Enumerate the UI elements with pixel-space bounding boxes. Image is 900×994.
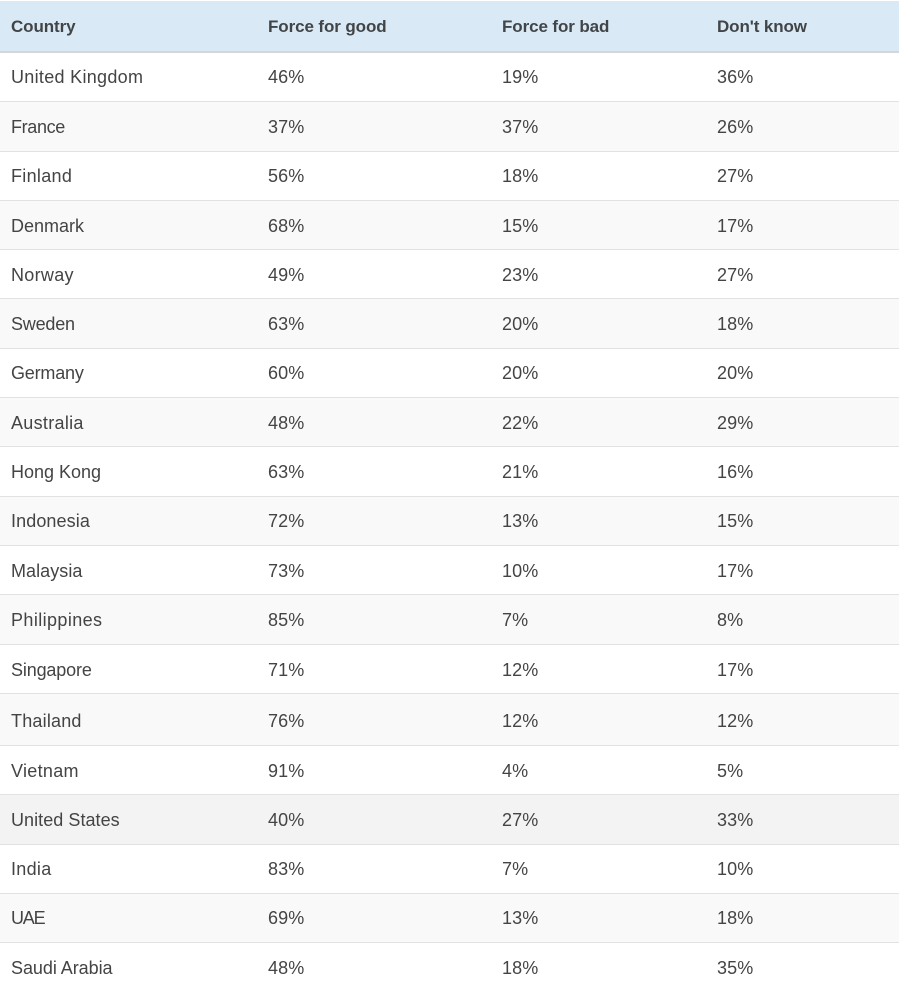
row: Finland: Finland [11,166,72,186]
row: Philippines: 8% [717,610,743,630]
row: Sweden: 18% [717,314,753,334]
row: Malaysia [0,546,899,595]
row: Indonesia: 15% [717,511,753,531]
row: Thailand: 76% [268,710,304,730]
row: United States: United States [11,810,120,830]
row: Philippines: Philippines [11,610,102,630]
row: UAE: 18% [717,908,753,928]
row: Australia [0,398,899,447]
row: Denmark [0,201,899,250]
row: Finland: 18% [502,166,538,186]
row: Norway [0,250,899,299]
row: Saudi Arabia: 18% [502,958,538,978]
header row: Force for good [268,17,387,36]
row: Denmark: 68% [268,216,304,236]
row: Indonesia: 13% [502,511,538,531]
row: United Kingdom: 46% [268,67,304,87]
row: United States: 27% [502,810,538,830]
row: UAE: 13% [502,908,538,928]
row: Finland: 27% [717,166,753,186]
row: Indonesia: 72% [268,511,304,531]
row: Malaysia: 73% [268,561,304,581]
row: Germany: 60% [268,363,304,383]
row: Hong Kong: Hong Kong [11,462,101,482]
row: India: 10% [717,859,753,879]
row: Vietnam: 91% [268,761,304,781]
header row: Force for bad [502,17,609,36]
row: Australia: Australia [11,413,84,433]
row: Singapore [0,645,899,694]
row: Singapore: Singapore [11,660,92,680]
row: Australia: 29% [717,413,753,433]
row: Germany: 20% [502,363,538,383]
row: UAE: 69% [268,908,304,928]
row: France: 37% [502,116,538,136]
row: Singapore: 12% [502,660,538,680]
row: Hong Kong: 63% [268,462,304,482]
row: Saudi Arabia: Saudi Arabia [11,958,112,978]
row: Thailand: Thailand [11,710,82,730]
row: Saudi Arabia: 35% [717,958,753,978]
header row: Don't know [717,17,807,36]
row: Singapore: 17% [717,660,753,680]
row: India: 7% [502,859,528,879]
row: India: 83% [268,859,304,879]
row: Germany [0,349,899,398]
row: India [0,845,899,894]
row: Saudi Arabia: 48% [268,958,304,978]
row: Indonesia [0,497,899,546]
row: Finland: 56% [268,166,304,186]
row: France: 37% [268,116,304,136]
row: Singapore: 71% [268,660,304,680]
row: Denmark: 17% [717,216,753,236]
row: Germany: 20% [717,363,753,383]
header row: Country [11,17,75,36]
row: Malaysia: Malaysia [11,561,82,581]
row: Norway: 49% [268,265,304,285]
row: United Kingdom: United Kingdom [11,67,143,87]
row: Australia: 48% [268,413,304,433]
row: France [0,102,899,152]
row: Philippines [0,595,899,645]
row: Germany: Germany [11,363,84,383]
row: Thailand: 12% [717,710,753,730]
row: Norway: 27% [717,265,753,285]
row: Malaysia: 17% [717,561,753,581]
header row [0,1,899,53]
row: Saudi Arabia [11,958,753,978]
row: Denmark: 15% [502,216,538,236]
row: UAE: UAE [11,908,44,928]
row: India: India [11,859,52,879]
row: Vietnam: 5% [717,761,743,781]
row: Denmark: Denmark [11,216,84,236]
row: Australia: 22% [502,413,538,433]
row: United Kingdom: 36% [717,67,753,87]
row: Sweden: Sweden [11,314,75,334]
row: UAE [0,894,899,943]
row: United States: 33% [717,810,753,830]
row: Hong Kong: 16% [717,462,753,482]
row: Philippines: 7% [502,610,528,630]
row: France: 26% [717,116,753,136]
row: Norway: 23% [502,265,538,285]
row: Vietnam: Vietnam [11,761,79,781]
row: Norway: Norway [11,265,74,285]
row: Thailand [0,694,899,746]
row: Sweden: 20% [502,314,538,334]
row: Vietnam [0,746,899,795]
row: United States [0,795,899,845]
row: Malaysia: 10% [502,561,538,581]
row: United States: 40% [268,810,304,830]
row: Philippines: 85% [268,610,304,630]
row: Sweden: 63% [268,314,304,334]
row: United Kingdom: 19% [502,67,538,87]
row: Thailand: 12% [502,710,538,730]
row: Sweden [0,299,899,349]
row: United Kingdom [0,53,899,102]
row: Vietnam: 4% [502,761,528,781]
row: Hong Kong: 21% [502,462,538,482]
row: Indonesia: Indonesia [11,511,90,531]
row: France: France [11,116,65,136]
row: Hong Kong [0,447,899,497]
row: Finland [0,152,899,201]
